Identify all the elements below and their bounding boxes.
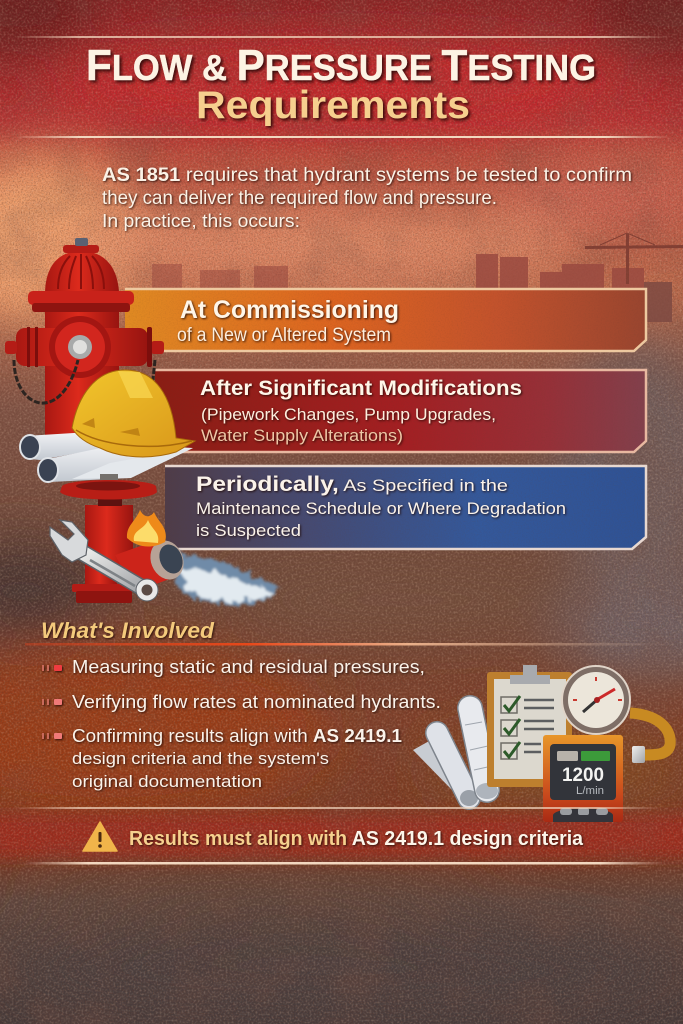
bullet 3: Confirming results align with AS 2419.1 bbox=[72, 726, 402, 746]
title bbox=[86, 41, 596, 127]
bullet 3: design criteria and the system's bbox=[72, 749, 329, 768]
banner: periodically bbox=[165, 466, 646, 549]
banner 3 text: Periodically, As Specified in the bbox=[196, 473, 508, 496]
skyline and crane bbox=[152, 233, 683, 322]
title: Requirements bbox=[196, 84, 470, 127]
intro text: they can deliver the required flow and pressure. bbox=[102, 188, 497, 209]
pipe outlet bbox=[115, 541, 172, 592]
icon: red valve with flame, wrench and water bbox=[50, 474, 282, 605]
icon: rolled blueprints bbox=[20, 432, 193, 482]
intro text: In practice, this occurs: bbox=[102, 211, 300, 231]
bullet 1: Measuring static and residual pressures, bbox=[72, 657, 425, 677]
title divider top bbox=[14, 36, 670, 38]
banner 3 text: Maintenance Schedule or Where Degradation bbox=[196, 499, 566, 518]
bullet 2: Verifying flow rates at nominated hydrants. bbox=[72, 692, 441, 712]
title divider bottom bbox=[14, 136, 670, 138]
icon: checklist clipboard bbox=[487, 665, 572, 787]
banner 1 subtext: of a New or Altered System bbox=[177, 325, 391, 346]
meter reading: 1200 bbox=[562, 765, 604, 786]
bullet 3 bbox=[42, 726, 402, 791]
callout: results must align bbox=[83, 822, 584, 851]
intro text bbox=[102, 165, 632, 231]
banner 1 heading: At Commissioning bbox=[180, 296, 399, 324]
banner 2 subtext: (Pipework Changes, Pump Upgrades, bbox=[201, 405, 496, 424]
banner 3 text: is Suspected bbox=[196, 521, 301, 540]
icon: yellow hard hat bbox=[72, 370, 195, 457]
bullet 3: original documentation bbox=[72, 772, 262, 791]
banner 2 heading: After Significant Modifications bbox=[200, 377, 522, 400]
icon: pressure gauge bbox=[562, 666, 630, 734]
meter unit: L/min bbox=[576, 785, 604, 797]
banner: after significant modifications bbox=[155, 370, 646, 452]
callout text: Results must align with AS 2419.1 design criteria bbox=[129, 828, 584, 850]
title: FLOW & PRESSURE TESTING bbox=[86, 41, 596, 90]
icon: warning triangle bbox=[83, 822, 117, 851]
wrench bbox=[50, 520, 158, 601]
icon: fire hydrant bbox=[5, 238, 164, 438]
divider above callout bbox=[14, 807, 662, 809]
banner: at commissioning bbox=[125, 289, 646, 351]
icon: hose bbox=[630, 713, 670, 763]
flame bbox=[127, 510, 166, 547]
icon: rolled plans bbox=[413, 708, 498, 806]
icon: digital flow meter bbox=[543, 735, 623, 822]
banner 3 text bbox=[196, 473, 566, 540]
intro text: AS 1851 requires that hydrant systems be tested to confirm bbox=[102, 165, 632, 186]
banner 2 subtext: Water Supply Alterations) bbox=[201, 426, 403, 445]
water spray bbox=[160, 552, 282, 605]
section heading: what's involved: What's Involved bbox=[41, 618, 215, 643]
bullet list bbox=[42, 657, 441, 791]
divider below callout bbox=[24, 862, 664, 864]
banner 2 subtext bbox=[201, 405, 496, 445]
